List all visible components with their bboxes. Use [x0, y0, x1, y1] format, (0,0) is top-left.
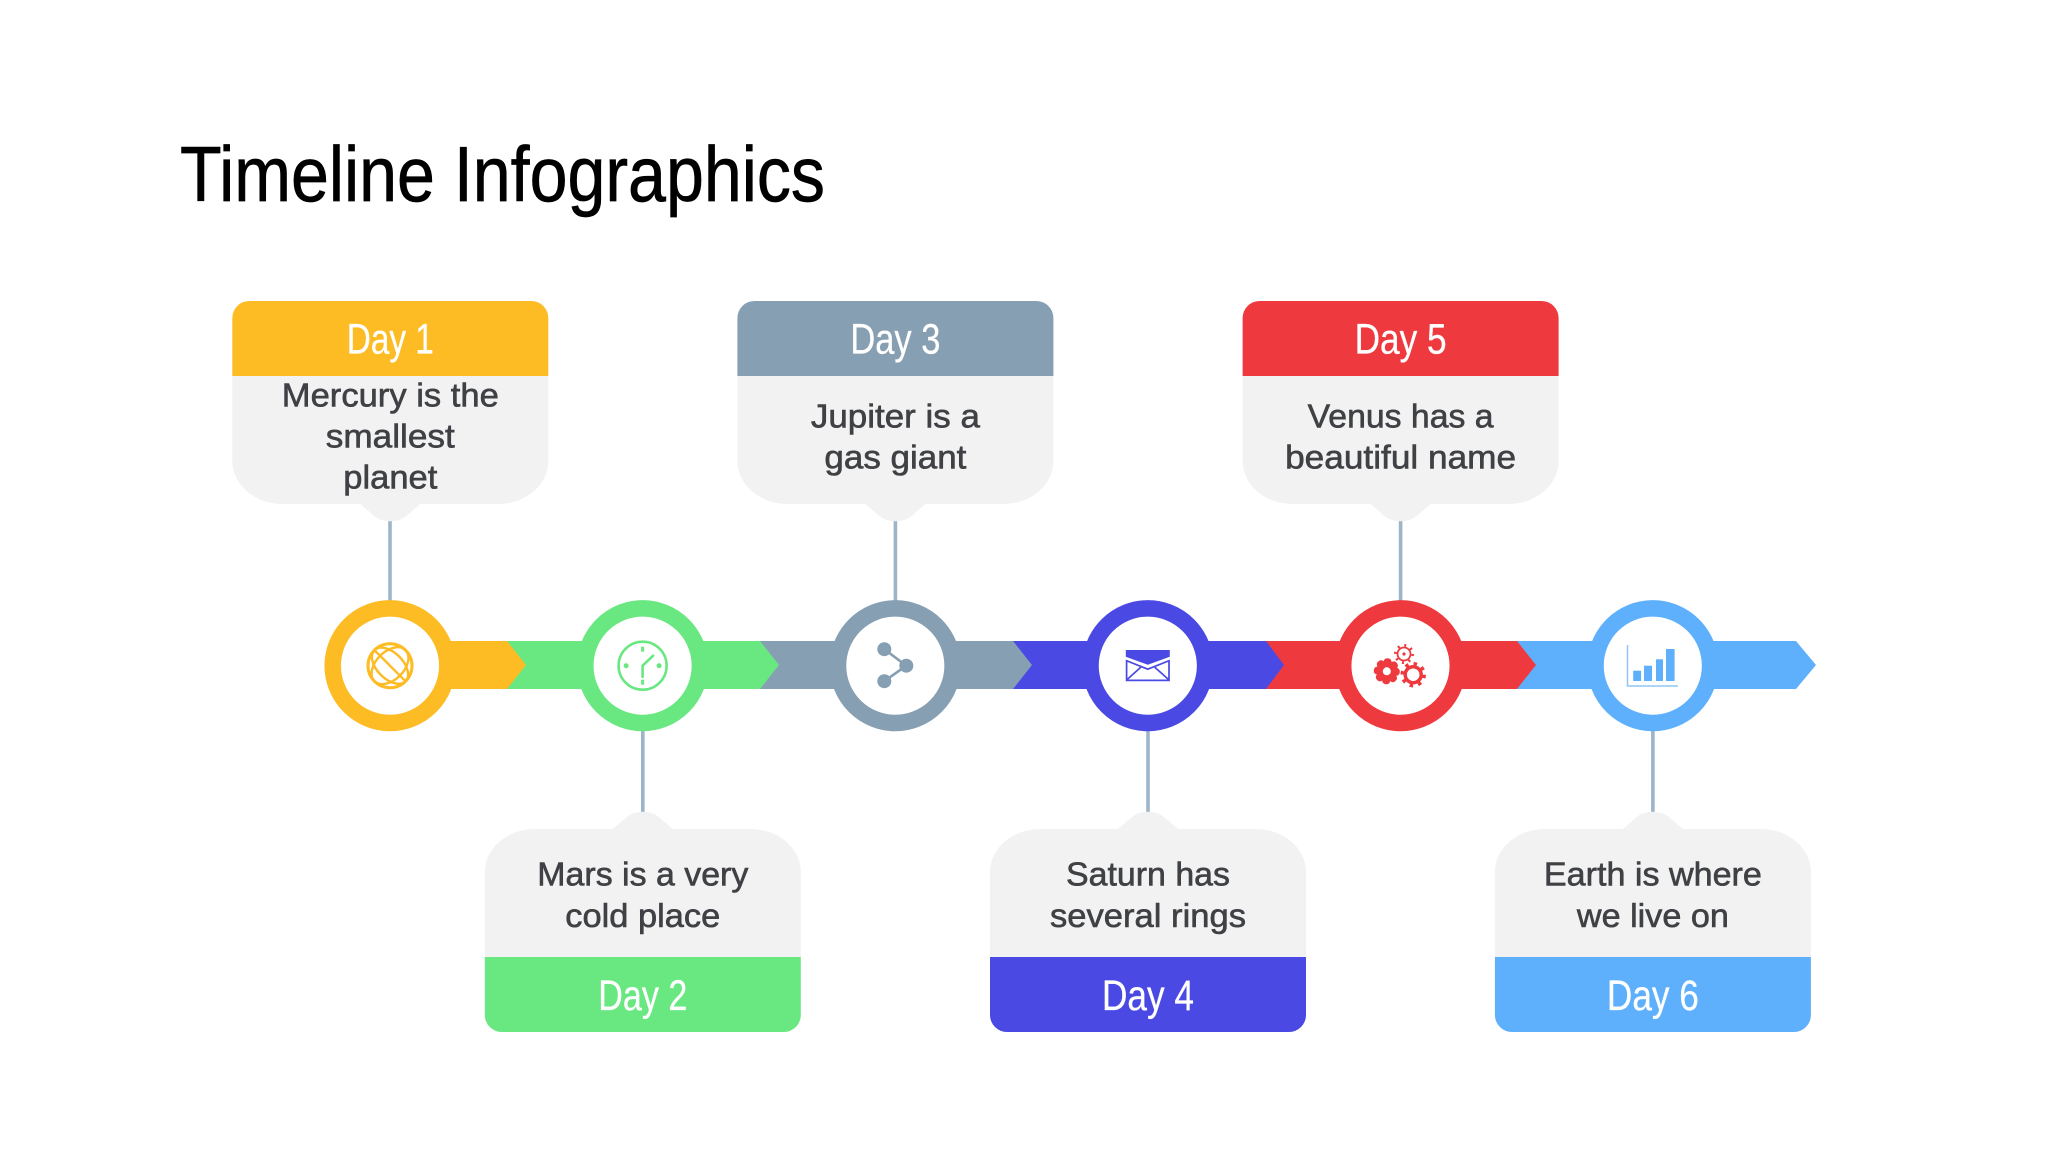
panel: day 5 card: beautiful name — [1285, 438, 1516, 476]
panel: day 2 card: Mars is a very — [537, 856, 749, 892]
panel: day 4 card: several rings — [1050, 897, 1246, 934]
panel: day 2 card: Day 2 — [598, 972, 687, 1020]
panel: day 4 card — [990, 812, 1306, 1032]
panel: day 5 card: Venus has a — [1308, 398, 1494, 434]
panel: day 2 card: cold place — [565, 897, 720, 934]
icon: bar chart node — [1596, 608, 1710, 723]
panel: day 6 card: we live on — [1576, 897, 1729, 934]
panel: day 5 card: Day 5 — [1355, 316, 1447, 364]
panel: day 6 card: Day 6 — [1607, 972, 1699, 1020]
panel: day 5 card — [1243, 301, 1559, 521]
panel: day 1 card: Day 1 — [347, 316, 434, 364]
panel: day 2 card — [485, 812, 801, 1032]
title: Timeline Infographics — [180, 130, 825, 218]
icon: gears node — [1343, 608, 1458, 723]
panel: day 4 card: Saturn has — [1066, 856, 1230, 892]
panel: day 3 card: Day 3 — [850, 316, 940, 364]
panel: day 3 card: Jupiter is a — [811, 398, 981, 434]
icon: envelope node — [1090, 608, 1205, 723]
icon: clock node — [585, 608, 700, 723]
panel: day 3 card: gas giant — [824, 438, 966, 476]
panel: day 1 card: smallest — [326, 418, 455, 454]
icon: globe node — [333, 608, 447, 723]
panel: day 6 card: Earth is where — [1544, 856, 1762, 892]
panel: day 1 card: planet — [343, 458, 437, 496]
panel: day 3 card — [737, 301, 1053, 521]
panel: day 6 card — [1495, 812, 1811, 1032]
timeline arrow bar — [390, 641, 1816, 689]
connector lines — [388, 521, 1655, 812]
panel: day 1 card — [232, 301, 548, 521]
icon: share node — [838, 608, 953, 723]
panel: day 4 card: Day 4 — [1102, 972, 1194, 1020]
panel: day 1 card: Mercury is the — [282, 376, 499, 414]
